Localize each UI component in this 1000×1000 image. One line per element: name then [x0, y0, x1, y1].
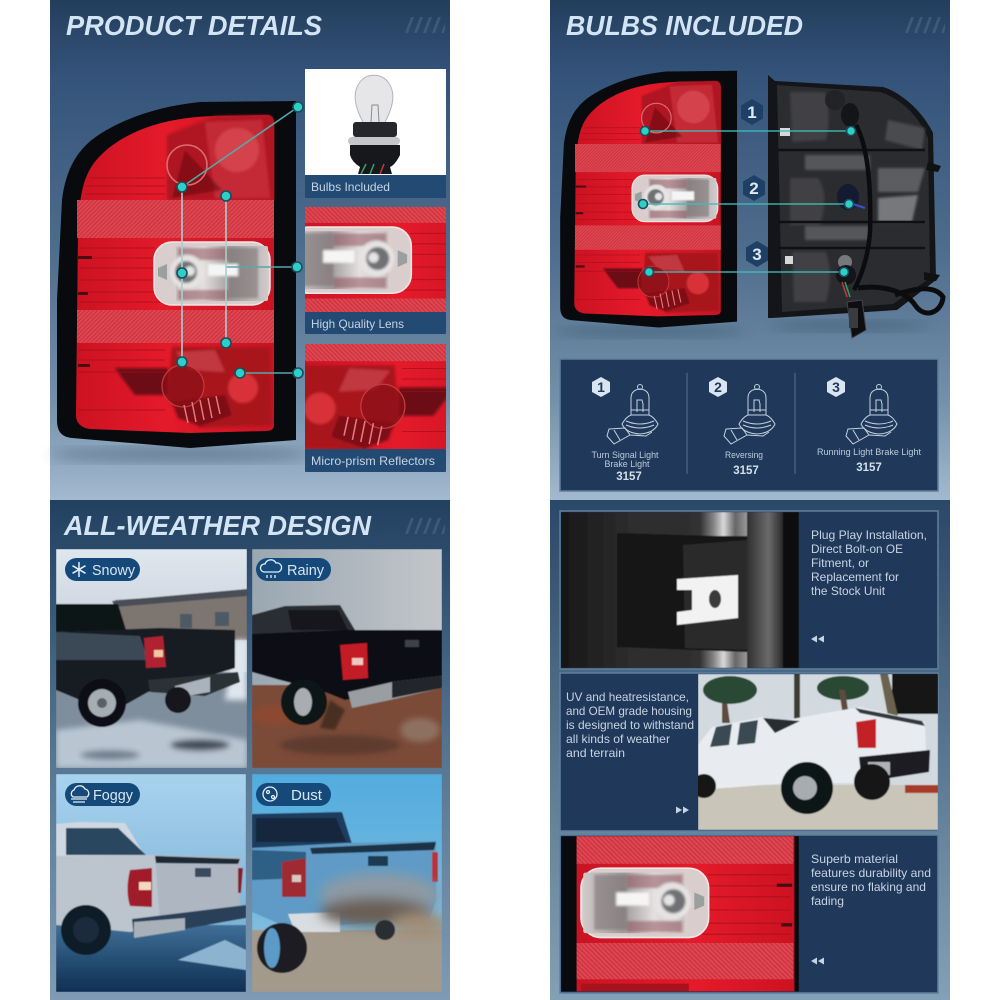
icon: arrows	[811, 958, 824, 964]
icon: arrows	[811, 636, 824, 642]
bulb 3: 3	[832, 379, 840, 395]
bulb 1	[592, 377, 659, 483]
feature row: resistance	[560, 673, 938, 831]
text block: fading	[811, 894, 844, 908]
connector lines	[638, 126, 856, 276]
panel: features	[550, 500, 950, 1000]
pill: dust	[256, 783, 331, 806]
bulb 1: Turn Signal Light	[592, 450, 659, 461]
bulb 2: 3157	[733, 465, 759, 477]
panel: product details	[50, 0, 450, 500]
text block: UV and heatresistance,	[566, 690, 689, 704]
badge 3	[746, 241, 768, 267]
label: High Quality Lens	[311, 317, 404, 331]
photo: rainy truck	[250, 549, 442, 768]
heading: bulbs included: BULBS INCLUDED	[566, 10, 803, 41]
bulb 1: 1	[597, 379, 605, 395]
pill: rainy: Rainy	[287, 563, 325, 579]
bulb 1: 3157	[616, 471, 642, 483]
label: Micro-prism Reflectors	[311, 454, 435, 468]
text block	[811, 528, 927, 598]
bulb 2	[709, 377, 775, 477]
bulb 3: 3157	[856, 462, 882, 474]
text block: ensure no flaking and	[811, 880, 926, 894]
text block: Plug Play Installation,	[811, 528, 927, 542]
card: micro-prism reflectors	[305, 344, 446, 472]
badge 3: 3	[752, 245, 762, 264]
photo: mounting bracket	[561, 512, 799, 668]
bulb 2: Reversing	[725, 450, 763, 461]
pill: snowy	[65, 558, 140, 581]
bulb 3: Running Light Brake Light	[817, 447, 921, 458]
feature row: installation	[560, 511, 938, 669]
text block	[566, 690, 694, 760]
photo: white dually truck	[692, 674, 938, 830]
pill: snowy: Snowy	[92, 563, 136, 579]
badge 1	[741, 99, 763, 125]
pill: foggy	[65, 783, 140, 806]
label: Bulbs Included	[311, 180, 390, 194]
bulb types panel	[560, 359, 938, 491]
text block: Superb material	[811, 852, 898, 866]
text block: Replacement for	[811, 570, 899, 584]
callout lines and dots	[177, 102, 303, 378]
text block: Fitment, or	[811, 556, 869, 570]
panel: bulbs included	[550, 0, 950, 500]
text block: Direct Bolt-on OE	[811, 542, 903, 556]
photo: dust truck	[252, 774, 450, 992]
card: bulbs included	[305, 69, 446, 198]
pill: foggy: Foggy	[93, 788, 134, 804]
pill: dust: Dust	[291, 788, 322, 804]
card: high quality lens	[305, 207, 446, 334]
text block: the Stock Unit	[811, 584, 886, 598]
bulb 2: 2	[714, 379, 722, 395]
text block: and OEM grade housing	[566, 704, 692, 718]
heading: all-weather design: ALL-WEATHER DESIGN	[63, 510, 372, 541]
text block: all kinds of weather	[566, 732, 670, 746]
bulb 3	[817, 377, 921, 474]
photo: lens closeup	[561, 836, 799, 991]
text block	[811, 852, 931, 908]
tail light front view	[50, 101, 310, 463]
tail light back view	[768, 75, 943, 338]
photo: foggy truck	[56, 774, 246, 992]
text block: is designed to withstand	[566, 718, 694, 732]
feature row: material	[560, 835, 938, 993]
icon: arrows	[676, 806, 689, 814]
text block: features durability and	[811, 866, 931, 880]
text block: and terrain	[566, 746, 625, 760]
icon: bulb photo	[348, 75, 400, 174]
badge 1: 1	[747, 103, 757, 122]
pill: rainy	[256, 558, 331, 581]
panel: all-weather design	[50, 500, 450, 1000]
heading: product details: PRODUCT DETAILS	[66, 10, 322, 41]
bulb 1: Brake Light	[604, 459, 650, 470]
tail light front view	[555, 71, 745, 338]
badge 2: 2	[749, 179, 759, 198]
badge 2	[743, 175, 765, 201]
photo: snowy truck	[56, 549, 247, 768]
